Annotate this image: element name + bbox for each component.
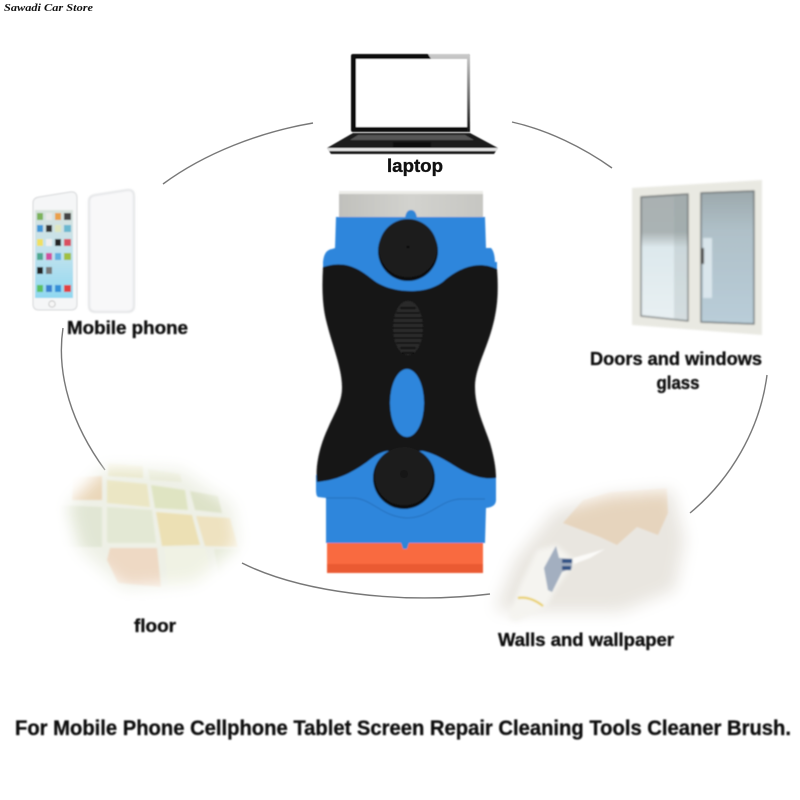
laptop keyboard [350, 135, 474, 140]
blue holder top [323, 217, 497, 280]
label: walls and wallpaper: Walls and wallpaper [498, 630, 674, 650]
window right pane [701, 191, 754, 324]
window [632, 180, 762, 335]
glove fingers [544, 546, 572, 592]
label: laptop: laptop [387, 156, 443, 176]
blue grip oval [390, 369, 424, 437]
phone front [33, 192, 77, 310]
laptop lid highlight [428, 54, 470, 132]
window left pane [641, 194, 688, 321]
blue holder bottom [316, 445, 496, 543]
label: floor: floor [134, 616, 176, 636]
laptop silver edge [327, 148, 498, 151]
glove [518, 546, 572, 606]
paper curl [573, 549, 605, 564]
window frame [632, 180, 762, 335]
black grip [317, 264, 498, 482]
steel blade [339, 191, 483, 218]
label: glass line: glass [656, 373, 700, 393]
blue holder centre dip [323, 262, 497, 300]
laptop icon [327, 54, 498, 154]
floor tiles [64, 461, 240, 590]
wall base [494, 486, 688, 632]
phone screen [35, 210, 73, 298]
bottom caption: For Mobile Phone Cellphone Tablet Screen Repair Cleaning Tools Cleaner Brush. [15, 717, 791, 740]
phone clear back case [89, 190, 134, 312]
laptop screen frame [351, 54, 470, 132]
peeled paper and arm [508, 545, 575, 622]
glove cuff [518, 598, 543, 606]
top knob [378, 219, 438, 281]
window handle [701, 248, 704, 264]
laptop touchpad [393, 142, 431, 148]
phones [15, 180, 791, 740]
label: doors and windows glass: Doors and windows [590, 349, 762, 369]
window reflection [674, 196, 687, 320]
wall and wallpaper [494, 486, 688, 632]
laptop display [356, 59, 467, 127]
connecting circle arcs [61, 122, 767, 598]
grip vent [393, 301, 423, 355]
laptop base [327, 133, 498, 154]
fingertips [562, 559, 572, 570]
window right pane light patch [703, 238, 712, 298]
exposed brick patch [563, 488, 668, 545]
lower holder detail [326, 498, 485, 518]
scraper tool [316, 191, 498, 573]
floor grout base [69, 461, 240, 590]
store name: Sawadi Car Store [4, 3, 93, 14]
home button [49, 301, 55, 307]
bottom knob [373, 447, 435, 509]
label: mobile phone: Mobile phone [67, 318, 188, 338]
orange plastic blade [327, 543, 483, 573]
